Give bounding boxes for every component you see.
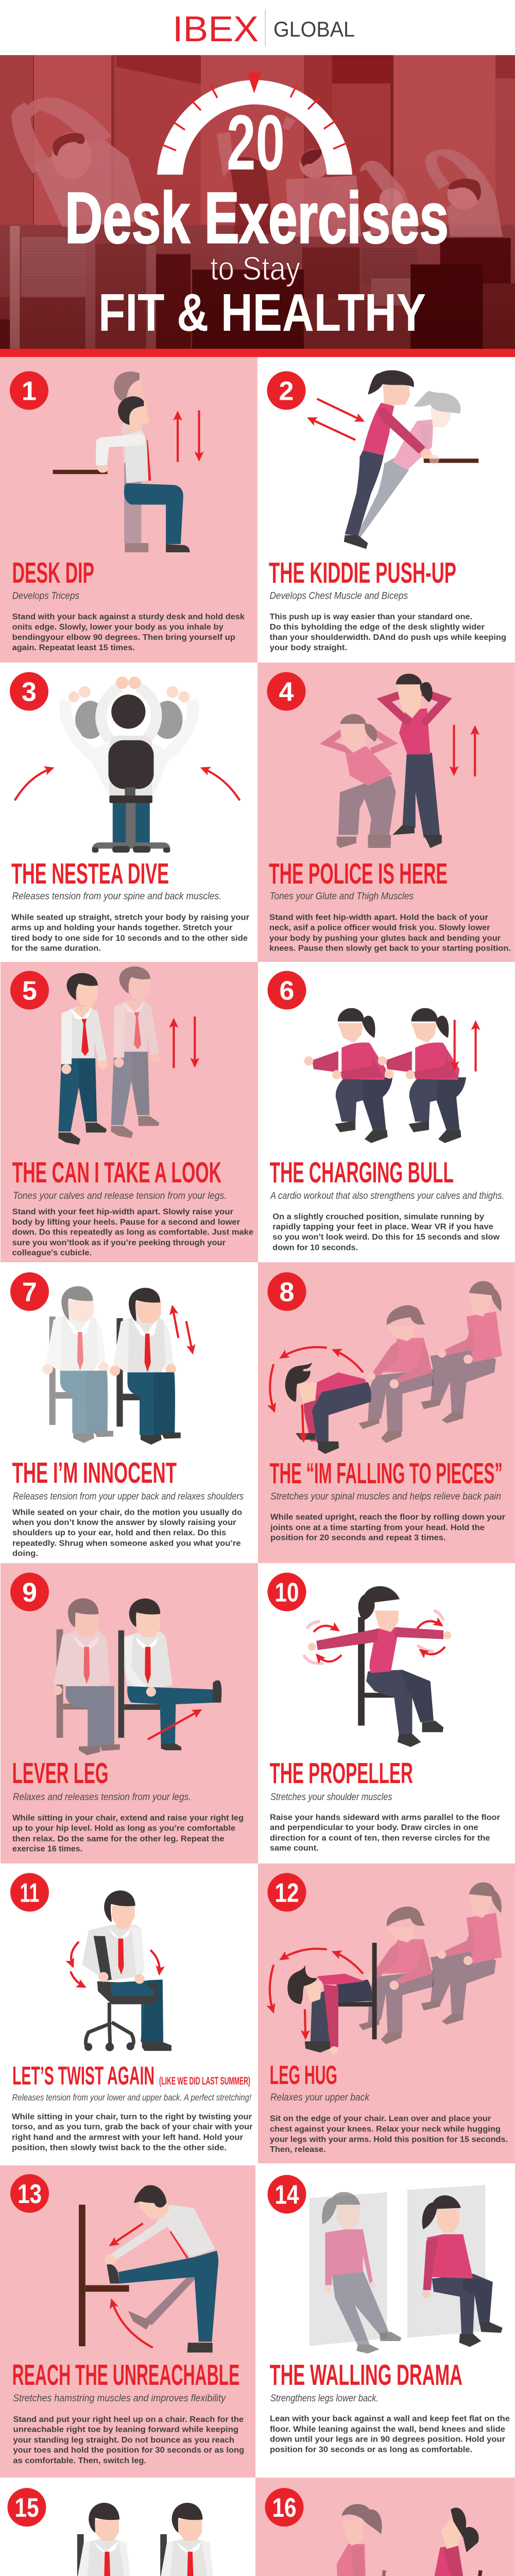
subtitle: Releases tension from your spine and back muscles. [12, 891, 221, 902]
body text [270, 1813, 500, 1853]
body text: This push up is way easier than your standard one. [270, 613, 472, 621]
body text [12, 2112, 252, 2152]
body text: arms up and holding your hands together. Stretch your [11, 923, 232, 932]
body text: repeatedly. Shrug when someone asked you what you’re [12, 1539, 241, 1548]
number badge 13: 13 [18, 2179, 42, 2209]
illustration: i'm innocent [42, 1286, 193, 1445]
body text: as comfortable. Then, switch leg. [13, 2456, 146, 2465]
number badge 14: 14 [275, 2180, 299, 2210]
illustration: fly high [295, 2504, 480, 2576]
body text: joints one at a time starting from your head. Hold the [270, 1523, 485, 1532]
title: REACH THE UNREACHABLE [12, 2359, 239, 2392]
body text: While seated upright, reach the floor by rolling down your [270, 1513, 505, 1522]
subtitle: Releases tension from your lower and upper back. A perfect stretching! [12, 2092, 251, 2103]
panel: 12 leg hug [258, 1863, 515, 2163]
number badge 13 [10, 2174, 49, 2213]
number badge 3 [10, 672, 48, 711]
body text: While sitting in your chair, extend and raise your right leg [12, 1814, 244, 1823]
subtitle: Develops Triceps [12, 590, 79, 602]
body text: While sitting in your chair, turn to the right by twisting your [12, 2112, 252, 2121]
body text: rapidly tapping your feet in place. Wear VR if you have [272, 1223, 493, 1231]
subtitle: Develops Chest Muscle and Biceps [270, 590, 408, 602]
hero lower office [0, 225, 515, 349]
number badge 15: 15 [14, 2493, 39, 2523]
body text: for the same duration. [11, 944, 101, 953]
body text: position for 30 seconds or as long as comfortable. [270, 2445, 472, 2454]
illustration: propeller [304, 1586, 451, 1747]
body text: sure you won’tlook as if you’re peeking through your [12, 1239, 226, 1247]
illustration: falling to pieces [270, 1281, 502, 1454]
red band [0, 349, 515, 357]
body text: your toes and hold the position for 30 seconds or as long [13, 2446, 244, 2455]
body text: doing. [12, 1549, 38, 1558]
number badge 16 [265, 2488, 304, 2527]
body text: your body straight. [270, 643, 347, 652]
body text: body by lifting your heels. Pause for a second and lower [12, 1218, 240, 1227]
body text: direction for a count of ten, then reverse circles for the [270, 1834, 490, 1843]
body text: up to your hip level. Hold as long as you’re comfortable [12, 1824, 235, 1833]
number badge 12 [268, 1873, 306, 1911]
body text: again. Repeatat least 15 times. [12, 643, 135, 652]
body text: Raise your hands sideward with arms parallel to the floor [270, 1813, 500, 1822]
body text: colleague's cubicle. [12, 1249, 92, 1258]
subtitle: Stretches your spinal muscles and helps relieve back pain [270, 1492, 501, 1502]
body text: torso, and as you turn, grab the back of your chair with your [12, 2123, 252, 2131]
number badge 1 [10, 371, 48, 410]
illustration: nestea dive [15, 676, 240, 853]
number badge 15 [7, 2488, 46, 2527]
title: THE PROPELLER [270, 1757, 413, 1790]
title: (LIKE WE DID LAST SUMMER) [159, 2075, 250, 2087]
number badge 14 [268, 2175, 306, 2213]
gauge icon [157, 72, 352, 175]
illustration: let's twist again [71, 1890, 171, 2051]
body text: same count. [270, 1844, 319, 1853]
body text: While seated up straight, stretch your body by raising your [11, 913, 249, 922]
body text: tired body to one side for 10 seconds and to the other side [11, 934, 248, 943]
body text: Stand with your back against a sturdy desk and hold desk [12, 613, 245, 621]
subtitle: Relaxes your upper back [270, 2092, 370, 2103]
title: LET’S TWIST AGAIN [12, 2061, 154, 2090]
body text: Stand with your feet hip-width apart. Slowly raise your [12, 1208, 233, 1216]
body text: shoulders up to your ear, hold and then relax. Do this [12, 1529, 226, 1537]
body text [270, 1513, 505, 1543]
number badge 3: 3 [22, 677, 37, 707]
body text [270, 2114, 508, 2154]
body text: than your shoulderwidth. DAnd do push ups while keeping [270, 633, 506, 642]
number badge 10: 10 [275, 1578, 299, 1607]
hero darkening [0, 55, 515, 349]
body text [12, 1509, 242, 1558]
title number 20: 20 [227, 99, 285, 187]
panel: 3 nestea dive [0, 663, 258, 962]
panel: 14 walling drama [255, 2163, 515, 2478]
illustration: walling drama [310, 2185, 503, 2353]
body text: down for 10 seconds. [272, 1244, 358, 1252]
body text: knees. Pause then slowly get back to your starting position. [269, 944, 511, 953]
panel: 16 fly high [255, 2478, 515, 2576]
body text: unreachable right toe by leaning forward while keeping [13, 2426, 238, 2434]
body text: Lean with your back against a wall and keep feet flat on the [270, 2414, 510, 2424]
illustration: desk dip [53, 371, 199, 552]
body text [272, 1213, 500, 1252]
subtitle: Tones your calves and release tension from your legs. [13, 1191, 227, 1201]
number badge 4 [267, 672, 306, 711]
illustration: squeeze till it bursts [72, 2503, 222, 2576]
subtitle: Stretches your shoulder muscles [270, 1792, 392, 1803]
body text: position for 20 seconds and repeat 3 times. [270, 1534, 446, 1543]
number badge 1: 1 [22, 376, 37, 406]
subtitle: Releases tension from your upper back and relaxes shoulders [13, 1492, 244, 1502]
panel: 1 desk dip [0, 357, 258, 663]
panel: 2 kiddie push-up [258, 357, 515, 663]
body text [270, 613, 506, 652]
number badge 8: 8 [280, 1278, 294, 1308]
panel: 10 propeller [258, 1563, 515, 1863]
body text: Stand and put your right heel up on a chair. Reach for the [13, 2415, 244, 2424]
panel: 7 i'm innocent [0, 1262, 258, 1563]
number badge 11: 11 [20, 1878, 39, 1908]
title: to Stay: to Stay [210, 250, 300, 287]
body text: On a slightly crouched position, simulate running by [272, 1213, 484, 1222]
header: logo: IBEX [173, 9, 259, 49]
title: LEVER LEG [12, 1757, 108, 1790]
title: DESK DIP [12, 556, 94, 589]
body text: then relax. Do the same for the other leg. Repeat the [12, 1835, 225, 1843]
title: THE I’M INNOCENT [12, 1456, 177, 1489]
body text [269, 913, 511, 953]
subtitle: Stretches hamstring muscles and improves flexibility [13, 2393, 226, 2404]
subtitle: Strengthens legs lower back. [270, 2393, 379, 2404]
title: THE CAN I TAKE A LOOK [12, 1156, 221, 1189]
body text [12, 1208, 253, 1258]
body text: right hand and the armrest with your left hand. Hold your [12, 2133, 243, 2142]
body text: exercise 16 times. [12, 1845, 82, 1854]
body text: Stand with feet hip-width apart. Hold the back of your [269, 913, 488, 922]
panel: 15 squeeze till it bursts [0, 2478, 255, 2576]
number badge 5 [10, 971, 49, 1010]
subtitle: Tones your Glute and Thigh Muscles [270, 891, 414, 902]
body text: down until your legs are in 90 degrees position. Hold your [270, 2435, 505, 2444]
body text [270, 2414, 510, 2454]
number badge 2 [267, 371, 306, 410]
illustration: reach the unreachable [79, 2185, 218, 2352]
number badge 6 [268, 971, 306, 1010]
body text: chest against your knees. Relax your neck while hugging [270, 2125, 501, 2134]
title: FIT & HEALTHY: FIT & HEALTHY [98, 283, 426, 342]
number badge 5: 5 [22, 976, 37, 1006]
number badge 6: 6 [280, 976, 294, 1006]
title: LEG HUG [270, 2060, 337, 2090]
hero photo: people stretching [11, 97, 503, 236]
body text: floor. While leaning against the wall, bend knees and slide [270, 2425, 505, 2434]
body text: when you don’t know the answer by slowly raising your [12, 1518, 236, 1527]
body text: onits edge. Slowly, lower your body as you inhale by [12, 623, 224, 632]
header: logo: GLOBAL [273, 17, 355, 41]
body text: neck, asif a police officer would frisk you. Slowly lower [269, 923, 490, 932]
body text: Do this byholding the edge of the desk slightly wider [270, 623, 485, 632]
panel: 5 can i take a look [1, 962, 258, 1262]
panel: 4 police is here [258, 663, 515, 962]
body text: Sit on the edge of your chair. Lean over and place your [270, 2114, 491, 2123]
number badge 16: 16 [272, 2493, 297, 2523]
body text [12, 613, 245, 652]
body text: bendingyour elbow 90 degrees. Then bring yourself up [12, 633, 235, 642]
illustration: lever leg [53, 1598, 221, 1755]
body text [12, 1814, 244, 1854]
number badge 12: 12 [275, 1878, 299, 1908]
body text: so you won’t look weird. Do this for 15 seconds and slow [272, 1233, 500, 1242]
number badge 4: 4 [279, 677, 294, 707]
header: logo [0, 0, 515, 55]
number badge 10 [268, 1572, 306, 1612]
body text: your standing leg straight. Do not bounce as you reach [13, 2436, 234, 2445]
body text: Then, release. [270, 2145, 326, 2154]
number badge 2: 2 [279, 376, 294, 406]
body text: your legs with your arms. Hold this position for 15 seconds. [270, 2135, 508, 2144]
illustration: charging bull [304, 1008, 476, 1143]
illustration: kiddie push-up [309, 370, 478, 549]
panel: 9 lever leg [1, 1563, 258, 1863]
title: THE NESTEA DIVE [11, 857, 169, 890]
illustration: leg hug [270, 1883, 502, 2054]
number badge 7 [10, 1273, 49, 1311]
number badge 7: 7 [22, 1278, 37, 1308]
hero banner [0, 55, 515, 349]
number badge 9 [10, 1572, 49, 1612]
body text: While seated on your chair, do the motion you usually do [12, 1509, 242, 1517]
body text: position, then slowly twist back to the the other side. [12, 2143, 227, 2152]
subtitle: Relaxes and releases tension from your legs. [13, 1792, 191, 1803]
panel: 13 reach the unreachable [0, 2165, 255, 2478]
body text [11, 913, 249, 953]
body text: down. Do this repeatedly as long as comfortable. Just make [12, 1228, 253, 1237]
illustration: can i take a look [59, 967, 195, 1145]
panel: 8 falling to pieces [258, 1262, 515, 1563]
panel: 11 let's twist again [0, 1863, 258, 2165]
body text: your body by pushing your glutes back and bending your [269, 934, 501, 943]
panel: 6 charging bull [258, 962, 515, 1262]
body text: and perpendicular to your body. Draw circles in one [270, 1823, 478, 1832]
body text [13, 2415, 244, 2465]
illustration: police is here [327, 674, 475, 848]
number badge 9: 9 [22, 1578, 37, 1607]
number badge 8 [268, 1273, 306, 1311]
number badge 11 [10, 1873, 49, 1911]
